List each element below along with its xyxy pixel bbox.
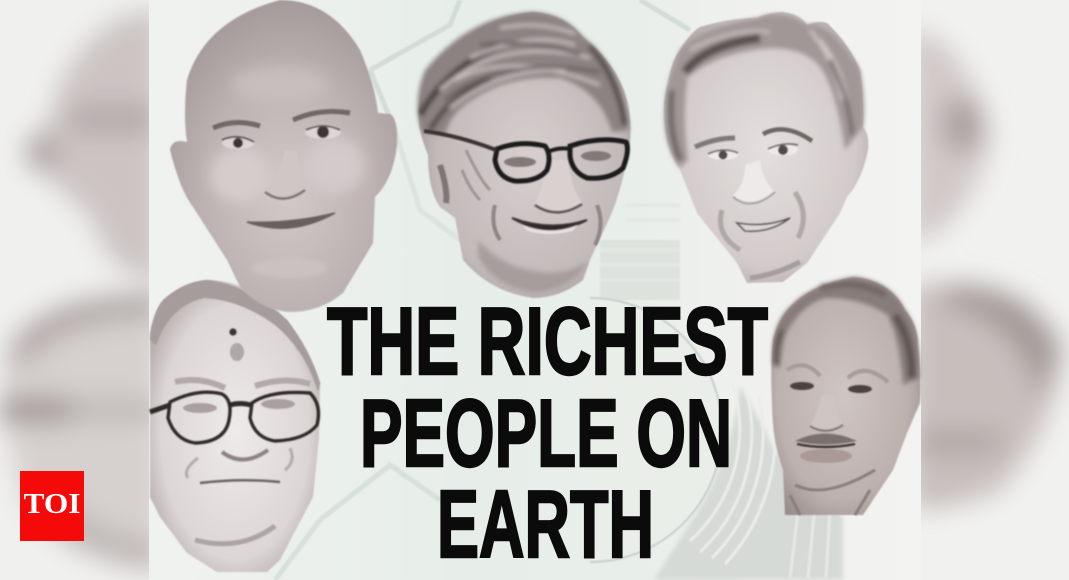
portrait: Jeff Bezos: [170, 0, 397, 312]
glasses: [424, 131, 627, 181]
glasses: [150, 392, 318, 443]
title line 1: THE RICHEST: [327, 288, 768, 395]
title line 3: EARTH: [437, 471, 654, 578]
title line 2: PEOPLE ON: [360, 380, 732, 487]
panel: blurred left background: [0, 0, 160, 580]
panel: centre background: [273, 0, 844, 580]
title: [327, 288, 768, 578]
facial details: [440, 150, 611, 292]
decoration: pale diagonal lines of the banknote: [275, 0, 690, 580]
portrait: Warren Buffett: [150, 280, 320, 572]
logo: TOI: TOI: [24, 489, 80, 520]
facial details: [175, 328, 310, 544]
hair: [418, 12, 629, 135]
hair: [665, 14, 864, 168]
facial details: [210, 67, 365, 278]
hair: [773, 277, 919, 385]
portrait: Carlos Slim: [771, 277, 921, 515]
portrait: Bernard Arnault: [664, 12, 868, 283]
facial details: [695, 129, 812, 278]
decoration: coin rings at lower right: [590, 298, 843, 580]
logo: TOI: [20, 471, 84, 541]
facial details: [787, 365, 888, 515]
panel: blurred right background: [921, 24, 1069, 519]
portrait: Bill Gates: [418, 12, 631, 298]
